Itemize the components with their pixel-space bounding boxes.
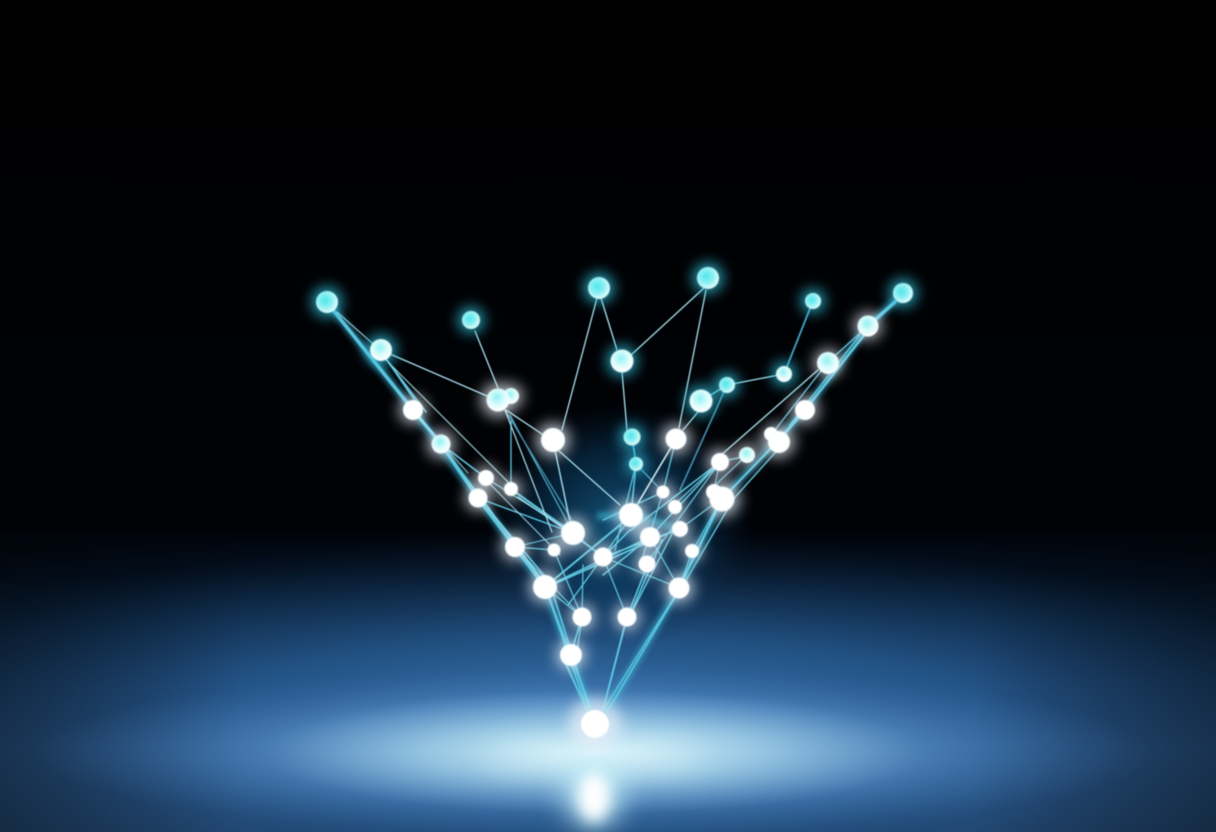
- cyan bundle lines: [333, 301, 895, 712]
- mixed nodes: [370, 316, 878, 463]
- inner glow of the network: [485, 400, 755, 650]
- white nodes: [403, 400, 815, 666]
- glowing floor: [0, 668, 1216, 832]
- bright floor core: [265, 690, 925, 814]
- root node: [581, 710, 609, 738]
- side vignette: [0, 540, 1216, 832]
- connection lines: [333, 288, 895, 712]
- pale upper lines: [337, 288, 818, 577]
- node glows: [312, 263, 917, 474]
- cyan tip nodes: [316, 267, 913, 471]
- floor reflection: [485, 748, 705, 828]
- thick glow lines along funnel edges: [327, 293, 903, 723]
- blue haze behind the funnel: [0, 535, 1216, 832]
- nodes: [316, 267, 913, 738]
